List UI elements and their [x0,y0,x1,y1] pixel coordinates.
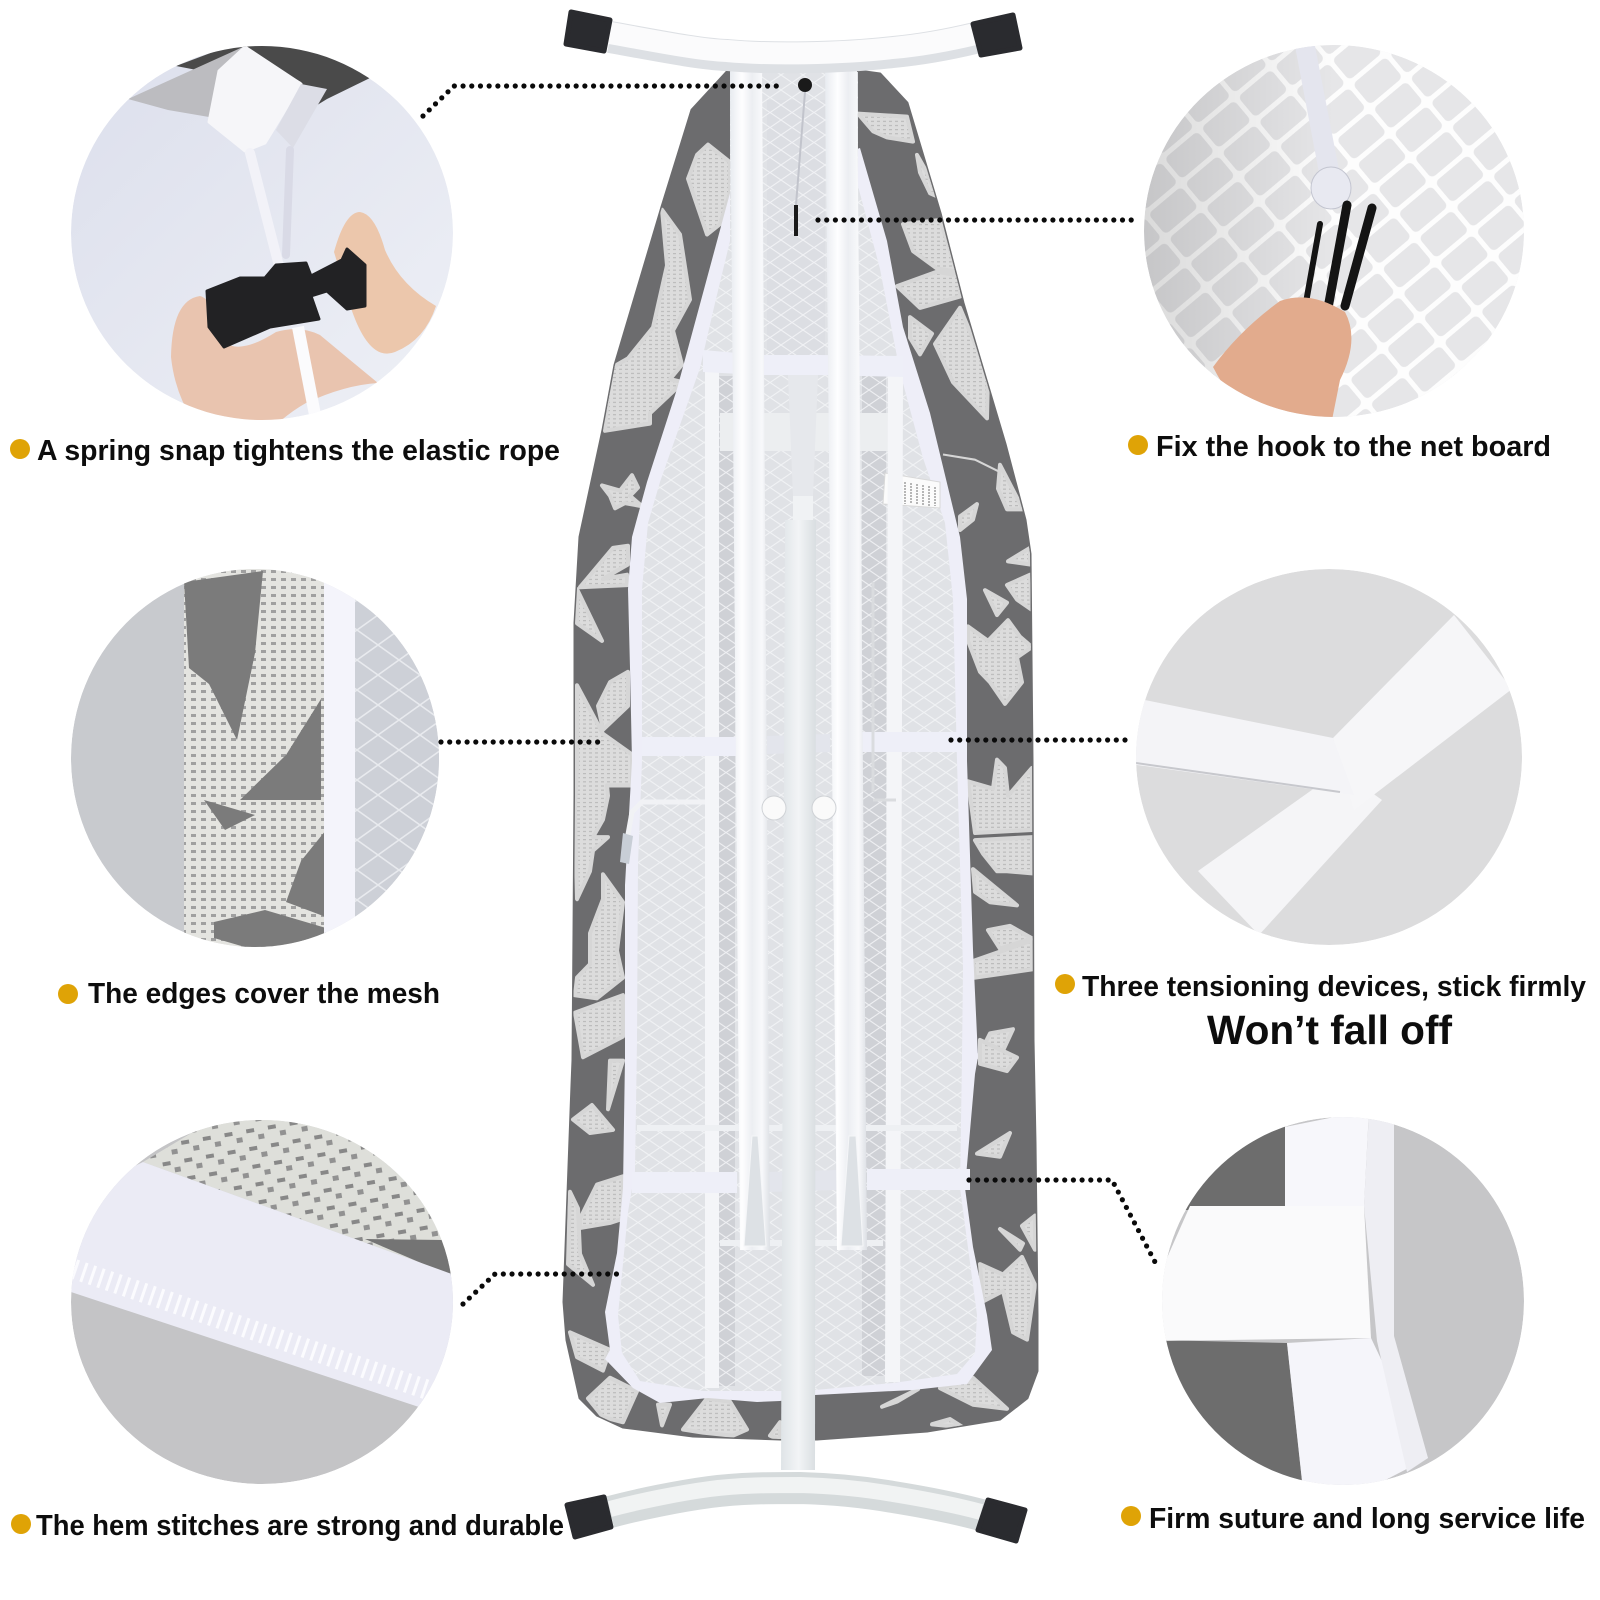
caption: won't fall off: Won’t fall off [1207,1007,1452,1053]
dotted leader: hook [818,217,1139,223]
bottom left rubber foot [567,1497,611,1537]
detail circle: spring snap and elastic rope [71,40,453,425]
second cloth corner [276,84,327,148]
detail circle: hem stitches [65,1110,460,1484]
thumb [1213,297,1351,430]
dark fabric upper [1186,1126,1285,1210]
black cord lock [207,249,365,347]
center leg tube [781,375,818,1470]
lower rope [298,327,316,420]
detail circle: firm suture [1155,1110,1524,1490]
dotted leader: hem stitches [463,1274,619,1304]
printed fabric [176,46,370,105]
left hand [171,296,378,425]
net shading [1144,51,1288,380]
mesh board surface [618,72,977,1391]
bottom right rubber foot [978,1500,1025,1541]
top hook knob [798,78,812,92]
dotted leader: spring snap [423,86,784,116]
left velcro band [1136,700,1343,790]
left leg tube [730,65,770,1250]
black hook [1305,205,1372,308]
vertical rails [705,372,903,1388]
care label [883,473,940,508]
dotted leader: suture [969,1180,1155,1262]
adjuster wire [873,582,896,800]
caption: hem stitches: The hem stitches are strong and durable [36,1510,564,1542]
caption: hook: Fix the hook to the net board [1156,431,1551,463]
upper diagonal velcro [1333,615,1512,810]
upper white binding [1285,1110,1369,1206]
dotted leader: tensioning [951,737,1126,743]
dark print corner [365,1239,454,1277]
under-board plate [720,413,888,451]
horizontal velcro [1155,1206,1371,1341]
dark fabric lower [1166,1340,1302,1480]
elastic cord [1296,46,1334,170]
dark print shapes [184,571,326,950]
board cover fabric [564,71,1037,1439]
stitched seam [1364,1112,1428,1472]
top elastic strap [703,350,903,377]
bent lever handle [620,802,705,864]
dotted leader: edges [441,739,600,745]
bottom T-bar [610,1485,981,1515]
band fold line [1136,763,1340,792]
middle elastic strap [642,732,967,756]
top left rubber foot [566,12,610,51]
detail circle: tensioning velcro [1130,569,1522,945]
caption: spring snap: A spring snap tightens the elastic rope [37,435,560,467]
lower elastic strap [632,1169,970,1193]
leg flared notches [744,1136,863,1246]
overlock stitching [74,1269,434,1392]
lower white binding [1287,1338,1428,1490]
top T-bar [610,33,975,57]
leg locking knobs [762,796,836,820]
floral print on cover [568,114,1035,1440]
white cover hem band [605,148,992,1403]
caption: suture: Firm suture and long service life [1149,1503,1585,1535]
detail circle: hook on net board [1144,45,1524,430]
printed hem strip [184,565,324,950]
right leg tube [825,65,867,1250]
caption: edges: The edges cover the mesh [88,978,440,1010]
white net pattern [1144,45,1524,417]
lower cross bars [637,1125,957,1246]
silver underside [128,46,245,117]
white binding [324,565,355,950]
detail circle: edges cover the mesh [71,565,445,950]
elastic rope [250,150,290,270]
printed fabric [144,1120,448,1262]
white twill hem [65,1162,460,1418]
silver mesh [355,600,439,916]
right finger [334,212,436,354]
lower velcro strip [1198,790,1382,932]
cord knot [1311,167,1351,209]
white cloth corner [209,47,301,151]
caption: tensioning devices: Three tensioning devices, stick firmly [1082,971,1586,1003]
cord and hook [794,92,805,236]
top right rubber foot [973,15,1020,55]
ironing board product photo [564,12,1037,1541]
